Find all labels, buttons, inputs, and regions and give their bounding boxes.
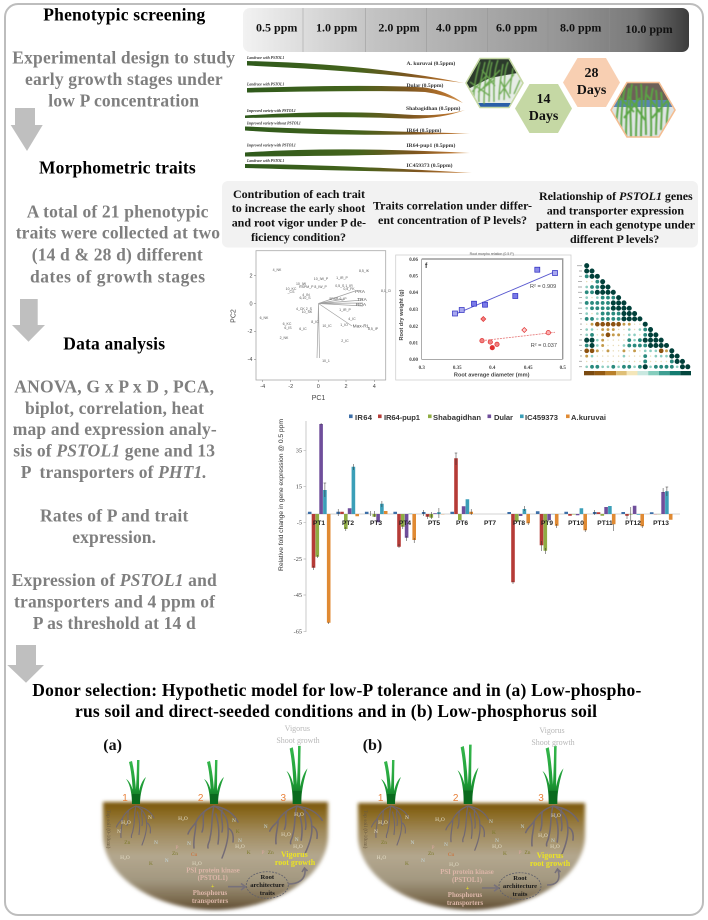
series: IR64 bbox=[308, 511, 654, 514]
chart: root scatter plot: 0.00 bbox=[409, 358, 418, 363]
leaf Shabagidhan: Improved variety with PSTOL1 bbox=[246, 109, 296, 113]
nutrient labels a: N bbox=[187, 841, 191, 847]
chart: PCA biplot: 4_IN bbox=[302, 293, 310, 297]
P concentration gradient bar: 4.0 ppm bbox=[436, 20, 477, 34]
panel letter b: (b) bbox=[363, 737, 382, 754]
chart: PCA biplot: 8_IC bbox=[311, 320, 319, 324]
photo hexagon: seedlings at 28 days bbox=[611, 82, 675, 138]
chart: PCA biplot: PC2 bbox=[230, 309, 238, 323]
leaf panel: genotypes at 0.5 ppm bbox=[245, 56, 472, 173]
nutrient labels a: H₂O bbox=[293, 844, 303, 850]
question 2 bbox=[373, 198, 532, 227]
root architecture traits b: Root bbox=[513, 875, 528, 882]
leaf A. kuruvai bbox=[246, 56, 464, 83]
gene labels: PT7 bbox=[484, 520, 496, 527]
nutrient labels b: N bbox=[495, 838, 499, 844]
nutrient labels b: H₂O bbox=[449, 862, 459, 868]
axis numbers: 35 bbox=[296, 448, 302, 455]
text block: expression threshold: transporters and 4 ppm of bbox=[14, 592, 215, 612]
nutrient labels a: N bbox=[154, 840, 158, 846]
chart: PCA biplot bbox=[230, 251, 391, 402]
nutrient labels b: Zn bbox=[428, 851, 434, 857]
chart: PCA biplot: 1_IR_P bbox=[339, 308, 351, 312]
nutrient labels a: N bbox=[295, 837, 299, 843]
depth label b: Top soil (0-10cm) bbox=[362, 810, 369, 849]
plant numbers b: 1 bbox=[378, 793, 384, 804]
nutrient labels a: Zn bbox=[124, 840, 131, 846]
chart: PCA biplot: 2 bbox=[249, 274, 253, 280]
vigorous root growth b bbox=[530, 851, 571, 868]
nutrient labels b: N bbox=[444, 842, 448, 848]
gene labels: PT8 bbox=[513, 520, 525, 527]
nutrient labels b: N bbox=[551, 838, 555, 844]
text block: experimental design: Experimental design to study bbox=[12, 47, 235, 67]
hexagon: 14 days: 14 bbox=[536, 92, 550, 107]
root architecture traits a: architecture bbox=[250, 882, 284, 889]
chart: PCA biplot: 2 bbox=[344, 384, 348, 390]
vigorous root growth a: Vigorus bbox=[281, 850, 308, 859]
chart: PCA biplot: 6_IC bbox=[299, 327, 307, 331]
chart: correlation heat map bbox=[577, 266, 691, 375]
chart: PCA biplot: 4_IC bbox=[348, 317, 356, 321]
leaf A. kuruvai: Landrace with PSTOL1 bbox=[246, 56, 284, 60]
nutrient labels b: H₂O bbox=[378, 820, 388, 826]
leaf IR64-pup1 bbox=[245, 142, 470, 156]
chart: root scatter plot: 0.04 bbox=[409, 291, 418, 296]
gene labels: PT5 bbox=[428, 520, 440, 527]
plant numbers b: 3 bbox=[538, 793, 544, 804]
series: Shabagidhan bbox=[316, 514, 661, 557]
question 1: ficiency condition? bbox=[251, 230, 346, 244]
question 2: Traits correlation under differ- bbox=[373, 198, 532, 212]
chart: PCA biplot: 1_IR_P bbox=[336, 276, 348, 280]
soil profile b bbox=[358, 803, 585, 910]
heading: morphometric traits: Morphometric traits bbox=[39, 157, 196, 177]
text block: rates of P bbox=[40, 506, 188, 547]
nutrient labels a: K bbox=[149, 861, 153, 867]
kinase labels a: PSI protein kinase bbox=[186, 868, 240, 874]
nutrient labels b: N bbox=[411, 840, 415, 846]
legend: Shabagidhan bbox=[433, 413, 481, 422]
leaf IR64: IR64 (0.5ppm) bbox=[406, 127, 441, 134]
nutrient labels b: P bbox=[432, 845, 434, 851]
vigorous root growth b: root growth bbox=[530, 859, 571, 868]
chart: root scatter plot: 0.5 bbox=[560, 366, 566, 371]
gene labels: PT3 bbox=[370, 520, 382, 527]
text block: statistical analyses: ANOVA, G x P x D , PCA, bbox=[14, 377, 214, 397]
leaf IC459373: Landrace with PSTOL1 bbox=[246, 159, 284, 163]
hexagon: 14 days: Days bbox=[529, 109, 559, 124]
nutrient labels a: H₂O bbox=[121, 820, 131, 826]
P concentration gradient bar: 2.0 ppm bbox=[378, 20, 420, 34]
text block: phenotypic traits: dates of growth stages bbox=[30, 267, 205, 287]
text block: phenotypic traits: (14 d & 28 d) different bbox=[32, 245, 203, 265]
leaf IR64: Improved variety without PSTOL1 bbox=[246, 122, 301, 126]
question 1: Contribution of each trait bbox=[233, 187, 365, 201]
P concentration gradient bar: 10.0 ppm bbox=[625, 22, 673, 36]
chart: PCA biplot: 4_CK 2_S bbox=[296, 307, 313, 311]
gene labels: PT1 bbox=[313, 520, 325, 527]
gene labels: PT10 bbox=[568, 520, 584, 527]
nutrient labels b: N bbox=[521, 824, 525, 830]
arrow to root growth b bbox=[547, 869, 560, 885]
question 2: ent concentration of P levels? bbox=[378, 213, 527, 227]
chart: PCA biplot: 6_IS bbox=[284, 326, 292, 330]
series: IC459373 bbox=[323, 467, 669, 515]
text block: expression threshold bbox=[12, 570, 217, 633]
kinase labels a: transporters bbox=[192, 898, 228, 905]
chart: PCA biplot: 10_IW bbox=[296, 282, 307, 286]
vigorous shoot growth b: Shoot growth bbox=[531, 738, 575, 747]
vigorous shoot growth b: Vigorus bbox=[539, 726, 565, 735]
leaf IC459373: IC459373 (0.5ppm) bbox=[406, 162, 453, 169]
text block: experimental design: low P concentration bbox=[48, 90, 199, 110]
arrow: down 3 bbox=[7, 645, 44, 683]
chart: PCA biplot: 10_IW_P bbox=[314, 277, 329, 281]
chart: PCA biplot: 4_NK bbox=[273, 268, 282, 272]
chart: PCA biplot: 10_SK bbox=[302, 310, 313, 314]
legend bbox=[349, 413, 606, 422]
plant numbers b bbox=[378, 793, 544, 804]
vigorous shoot growth a bbox=[276, 724, 320, 745]
question 3: Relationship of PSTOL1 genes bbox=[539, 189, 693, 203]
kinase labels a bbox=[186, 868, 240, 905]
chart: PCA biplot: 6_KC bbox=[283, 322, 292, 326]
chart: PCA biplot: 0 bbox=[317, 384, 320, 390]
chart: root scatter plot: 0.02 bbox=[409, 325, 418, 330]
nutrient labels a: N bbox=[148, 815, 152, 821]
question 3: and transporter expression bbox=[547, 203, 684, 217]
panel: research questions bbox=[222, 181, 698, 248]
nutrient labels a: N bbox=[232, 818, 236, 824]
chart: PCA biplot: 10_KC bbox=[286, 287, 297, 291]
root architecture traits a: traits bbox=[260, 890, 275, 897]
legend: A.kuruvai bbox=[571, 413, 606, 422]
chart: PCA biplot: 6_NK bbox=[260, 316, 269, 320]
heading: donor selection: Donor selection: Hypothetic model for low-P tolerance and in (a) Low-phospho- bbox=[32, 680, 641, 700]
heading: donor selection: rus soil and direct-seeded conditions and in (b) Low-phosphorus soil bbox=[75, 701, 597, 721]
nutrient labels a: P bbox=[176, 845, 178, 851]
chart: PCA biplot: _CS bbox=[287, 290, 295, 294]
kinase labels b: Phosphorus bbox=[448, 892, 483, 899]
chart: PCA biplot: 8,1_Cl bbox=[381, 289, 391, 293]
depth label a: Top soil (0-10cm) bbox=[105, 810, 112, 849]
column: workflow steps bbox=[7, 5, 235, 683]
P concentration gradient bar bbox=[243, 8, 689, 52]
leaf Shabagidhan: Shabagidhan (0.5ppm) bbox=[406, 105, 461, 112]
nutrient labels a: H₂O bbox=[192, 861, 202, 867]
text block: statistical analyses bbox=[13, 377, 217, 482]
nutrient labels a: K bbox=[236, 829, 240, 835]
leaf Dular: Dular (0.5ppm) bbox=[406, 82, 444, 89]
roots b bbox=[372, 806, 578, 855]
rice plants b bbox=[381, 745, 564, 804]
hexagon: 28 days: Days bbox=[577, 83, 607, 98]
nutrient labels a: H₂O bbox=[294, 812, 304, 818]
question 3: pattern in each genotype under bbox=[536, 218, 696, 232]
hexagon: 28 days: 28 bbox=[584, 66, 598, 81]
kinase labels b: PSI protein kinase bbox=[440, 869, 494, 876]
gene labels: PT9 bbox=[541, 520, 553, 527]
chart: PCA biplot: PC1 bbox=[312, 395, 325, 402]
vigorous shoot growth a: Shoot growth bbox=[276, 736, 320, 745]
chart: root scatter plot: f bbox=[425, 263, 428, 270]
nutrient labels a: N bbox=[165, 858, 169, 864]
chart: PCA biplot: RDA bbox=[356, 302, 367, 308]
root architecture traits a: Root bbox=[261, 874, 275, 881]
diagram (a): soil model bbox=[103, 724, 328, 910]
chart: root scatter plot bbox=[396, 252, 571, 380]
nutrient labels a: N bbox=[117, 829, 121, 835]
question 3: different P levels? bbox=[570, 232, 659, 246]
gene labels: PT6 bbox=[456, 520, 468, 527]
nutrient labels b: N bbox=[421, 858, 425, 864]
chart: PCA biplot: 1_IO bbox=[340, 323, 348, 327]
nutrient labels a: H₂O bbox=[281, 832, 291, 838]
axis title: Relative fold change in gene expression @ 0.5 ppm bbox=[278, 419, 285, 571]
plant numbers a: 2 bbox=[198, 793, 204, 804]
P concentration gradient bar: 1.0 ppm bbox=[316, 20, 357, 34]
heading: donor selection bbox=[32, 680, 641, 721]
nutrient labels b: H₂O bbox=[551, 813, 561, 819]
nutrient labels b: P bbox=[518, 850, 522, 856]
chart: relative fold change bar chart bbox=[278, 413, 680, 636]
chart: PCA biplot: -2 bbox=[248, 329, 252, 335]
kinase labels b: + bbox=[466, 886, 470, 892]
chart: root scatter plot: 0.03 bbox=[409, 308, 418, 313]
root architecture traits b: architecture bbox=[503, 883, 537, 890]
text block: statistical analyses: sis of PSTOL1 gene and 13 bbox=[13, 441, 215, 461]
chart: root scatter plot: 0.06 bbox=[409, 258, 418, 263]
vigorous root growth a bbox=[275, 850, 316, 867]
question 1: to increase the early shoot bbox=[232, 201, 365, 215]
chart: PCA biplot: 10_IC bbox=[322, 324, 332, 328]
leaf IR64-pup1: Improved variety with PSTOL1 bbox=[246, 144, 296, 148]
chart: PCA biplot: RSPM_P 8_IW_P bbox=[299, 285, 328, 289]
chart: PCA biplot: 6,10_S bbox=[299, 296, 311, 300]
text block: rates of P: Rates of P and trait bbox=[40, 506, 188, 526]
leaf IR64-pup1: IR64-pup1 (0.5ppm) bbox=[406, 142, 455, 149]
chart: PCA biplot: 0 bbox=[249, 302, 253, 308]
series: Dular bbox=[319, 424, 665, 538]
chart: PCA biplot: 0,5_FK bbox=[343, 287, 355, 291]
nutrient labels b: H₂O bbox=[377, 855, 386, 861]
leaf Dular: Landrace with PSTOL1 bbox=[246, 82, 284, 86]
text block: expression threshold: P as threshold at 14 d bbox=[33, 613, 196, 633]
chart: PCA biplot: 0,5_S 1_IR bbox=[335, 284, 353, 288]
leaf Shabagidhan bbox=[245, 105, 465, 119]
gene labels: PT2 bbox=[342, 520, 354, 527]
chart: root scatter plot: 0.45 bbox=[524, 366, 533, 371]
leaf A. kuruvai: A. kuruvai (0.5ppm) bbox=[406, 60, 455, 67]
leaf IR64 bbox=[245, 122, 470, 135]
nutrient labels b: H₂O bbox=[550, 844, 560, 850]
nutrient labels a: Cu bbox=[191, 852, 197, 858]
P concentration gradient bar: 0.5 ppm bbox=[256, 20, 297, 34]
gene labels: PT11 bbox=[597, 520, 613, 527]
rice plants a bbox=[126, 746, 308, 804]
nutrient labels b: K bbox=[503, 851, 507, 857]
arrow to root traits b bbox=[482, 885, 498, 891]
arrow to root traits a bbox=[228, 884, 246, 890]
chart: root scatter plot: 0.3 bbox=[419, 366, 425, 371]
nutrient labels a: Zn bbox=[172, 851, 178, 857]
text block: experimental design: early growth stages under bbox=[25, 69, 223, 89]
chart: PCA biplot: -4 bbox=[248, 357, 252, 363]
text block: statistical analyses: P transporters of PHT1. bbox=[21, 462, 207, 482]
chart: root scatter plot: Root dry weight (g) bbox=[399, 289, 405, 340]
text block: expression threshold: Expression of PSTOL1 and bbox=[12, 570, 217, 590]
plant numbers b: 2 bbox=[453, 793, 459, 804]
chart: PCA biplot: 4 bbox=[373, 384, 376, 390]
legend: IC459373 bbox=[525, 413, 558, 422]
chart: root scatter plot: R² = 0.037 bbox=[531, 343, 557, 349]
nutrient labels b: N bbox=[489, 819, 493, 825]
P concentration gradient bar: 8.0 ppm bbox=[560, 20, 601, 34]
axis numbers: -5 bbox=[297, 520, 302, 527]
text block: phenotypic traits: traits were collected at two bbox=[16, 223, 220, 243]
kinase labels b: (PSTOL1) bbox=[452, 877, 482, 884]
nutrient labels b: Cu bbox=[448, 852, 454, 858]
nutrient labels b: N bbox=[405, 815, 409, 821]
series: A.kuruvai bbox=[327, 511, 672, 623]
nutrient labels a: Zn bbox=[268, 850, 274, 856]
plant numbers a bbox=[122, 793, 287, 804]
panel letter a: (a) bbox=[103, 737, 122, 754]
chart: root scatter plot: Root morpho relation (0.5 P) bbox=[470, 252, 514, 256]
photo hexagon: seedlings at 14 days bbox=[466, 58, 523, 108]
axis numbers: -65 bbox=[294, 629, 302, 636]
plant numbers a: 1 bbox=[122, 793, 128, 804]
nutrient labels b bbox=[374, 813, 561, 868]
text block: experimental design bbox=[12, 47, 235, 110]
chart: PCA biplot: 2_NK bbox=[280, 336, 289, 340]
arrow: down 1 bbox=[11, 108, 43, 151]
vigorous shoot growth b bbox=[531, 726, 575, 747]
legend: Dular bbox=[494, 413, 513, 422]
nutrient labels b: H₂O bbox=[435, 817, 445, 823]
nutrient labels a: H₂O bbox=[235, 844, 245, 850]
kinase labels a: + bbox=[211, 884, 215, 890]
nutrient labels b: Zn bbox=[524, 850, 531, 856]
vigorous root growth b: Vigorus bbox=[537, 851, 563, 860]
diagram (b): soil model bbox=[358, 726, 585, 910]
kinase labels a: (PSTOL1) bbox=[198, 875, 228, 882]
soil profile a bbox=[103, 802, 328, 910]
chart: PCA biplot: 10_1 bbox=[322, 359, 330, 363]
heading: data analysis: Data analysis bbox=[63, 333, 165, 353]
leaf IC459373 bbox=[245, 159, 472, 173]
chart: root scatter plot: R² = 0.909 bbox=[530, 284, 556, 290]
blue series points bbox=[452, 267, 558, 316]
chart: PCA biplot: -2 bbox=[288, 384, 293, 390]
axis numbers: 15 bbox=[296, 484, 302, 491]
chart: root scatter plot: Root average diameter (mm) bbox=[454, 373, 530, 379]
roots a bbox=[116, 806, 322, 858]
hexagon: 14 days bbox=[515, 84, 572, 133]
kinase labels a: Phosphorus bbox=[193, 890, 228, 897]
chart: PCA biplot: 8,5_IP bbox=[368, 327, 379, 331]
plant numbers a: 3 bbox=[281, 793, 287, 804]
chart: PCA biplot: Max-RL bbox=[353, 324, 370, 330]
root architecture traits b bbox=[499, 873, 541, 899]
nutrient labels b: K bbox=[492, 830, 496, 836]
nutrient labels a: H₂O bbox=[120, 855, 130, 861]
chart: PCA biplot: TRA bbox=[357, 297, 368, 303]
chart: root scatter plot: 0.35 bbox=[453, 366, 462, 371]
gene labels: PT12 bbox=[625, 520, 641, 527]
axis numbers: -45 bbox=[294, 592, 302, 599]
question 1: and root vigor under P de- bbox=[232, 216, 366, 230]
nutrient labels a: N bbox=[264, 824, 268, 830]
text block: statistical analyses: map and expression analy- bbox=[13, 419, 217, 439]
chart: root scatter plot: 0.01 bbox=[409, 342, 418, 346]
axis numbers: -25 bbox=[294, 556, 302, 563]
chart: PCA biplot: 8,5_IK bbox=[359, 269, 370, 273]
question 1 bbox=[232, 187, 366, 244]
arrow: down 2 bbox=[12, 299, 45, 342]
chart: PCA biplot: 5RSB 6_IP bbox=[329, 297, 347, 301]
nutrient labels b: Zn bbox=[381, 840, 387, 846]
chart: PCA biplot: 2_IC bbox=[341, 339, 349, 343]
chart: PCA biplot: -4 bbox=[260, 384, 265, 390]
gene labels: PT4 bbox=[399, 520, 411, 527]
root architecture traits a bbox=[246, 872, 288, 898]
colour scale bbox=[584, 371, 691, 375]
nutrient labels a: H₂O bbox=[178, 816, 188, 822]
chart: PCA biplot: PRA bbox=[355, 289, 366, 295]
nutrient labels a bbox=[117, 812, 304, 867]
legend: IR64 bbox=[355, 413, 373, 422]
kinase labels b bbox=[440, 869, 494, 907]
nutrient labels b: H₂O bbox=[538, 833, 548, 839]
legend: IR64-pup1 bbox=[384, 413, 421, 422]
gene labels: PT13 bbox=[653, 520, 669, 527]
arrow to root growth a bbox=[288, 868, 308, 884]
nutrient labels a: P bbox=[262, 850, 264, 856]
text block: statistical analyses: biplot, correlation, heat bbox=[25, 398, 204, 418]
gene labels bbox=[313, 520, 669, 527]
nutrient labels a: K bbox=[247, 850, 251, 856]
leaf Dular bbox=[246, 82, 463, 103]
axis numbers bbox=[294, 448, 302, 636]
chart: root scatter plot: 0.4 bbox=[489, 366, 496, 371]
nutrient labels b: K bbox=[405, 861, 409, 867]
nutrient labels b: N bbox=[374, 829, 378, 835]
heading: phenotypic screening: Phenotypic screening bbox=[43, 5, 206, 25]
vigorous shoot growth a: Vigorus bbox=[285, 724, 310, 733]
chart: root scatter plot: 0.05 bbox=[409, 274, 418, 280]
hexagon: 28 days bbox=[563, 58, 620, 107]
text block: phenotypic traits bbox=[16, 201, 220, 287]
nutrient labels a: N bbox=[238, 838, 242, 844]
question 3 bbox=[536, 189, 696, 246]
nutrient labels b: H₂O bbox=[492, 844, 502, 850]
root architecture traits b: traits bbox=[512, 891, 528, 898]
red series points bbox=[480, 316, 550, 350]
text block: rates of P: expression. bbox=[72, 527, 156, 547]
P concentration gradient bar: 6.0 ppm bbox=[496, 20, 537, 34]
vigorous root growth a: root growth bbox=[275, 858, 316, 867]
kinase labels b: transporters bbox=[447, 900, 483, 907]
text block: phenotypic traits: A total of 21 phenotypic bbox=[27, 201, 209, 221]
series: IR64-pup1 bbox=[312, 458, 657, 582]
